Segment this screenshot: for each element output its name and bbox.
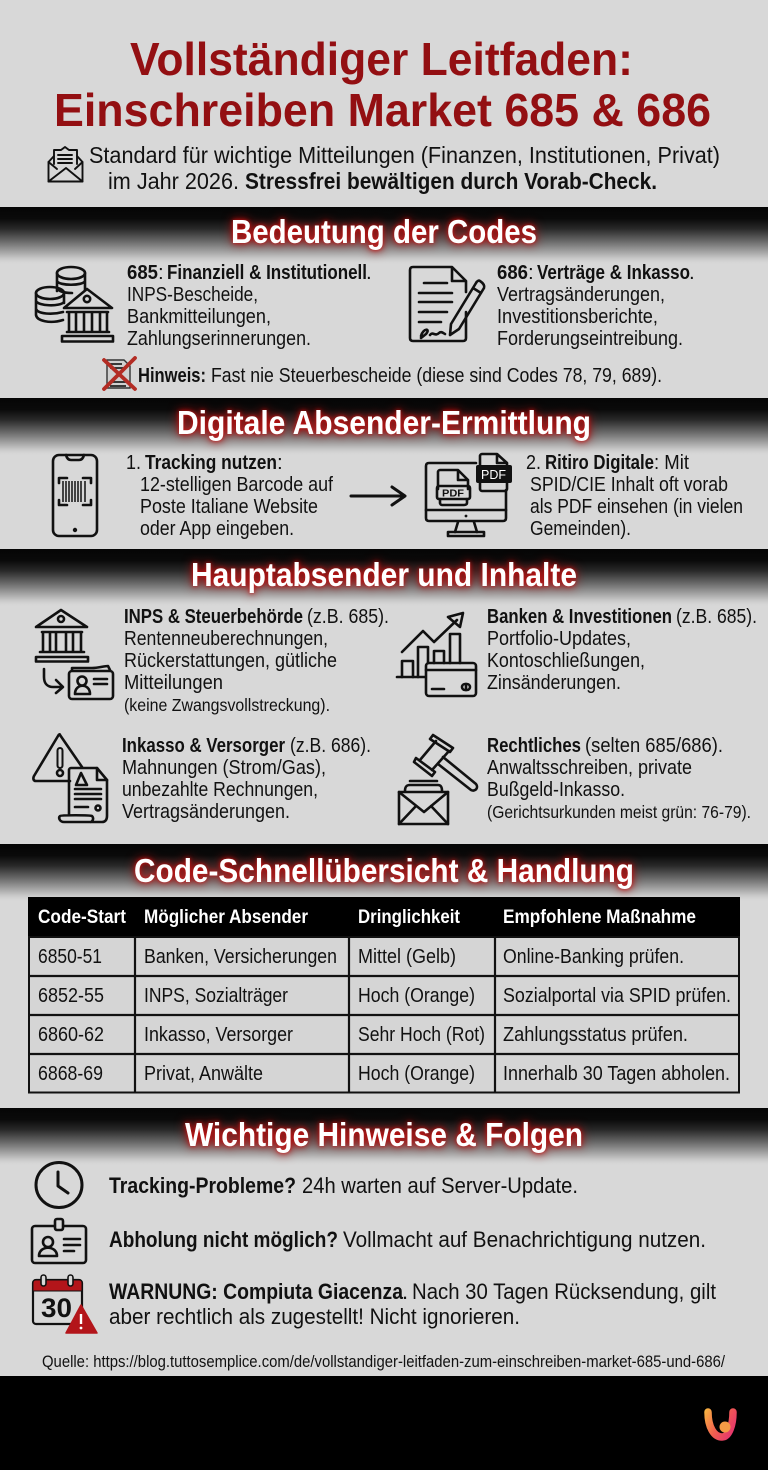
text block: legal xyxy=(487,734,751,822)
text block: 685: 685 xyxy=(127,261,158,284)
text block: step 1 tracking: 12-stelligen Barcode auf xyxy=(140,473,333,496)
row: 6850-51: Online-Banking prüfen. xyxy=(503,946,684,968)
text block: 685: : xyxy=(158,261,164,284)
subtitle xyxy=(89,142,720,194)
text block: 686: Vertragsänderungen, xyxy=(497,283,665,306)
text block: INPS and tax authority xyxy=(124,605,389,715)
panel: Digitale Absender-Ermittlung xyxy=(0,398,768,540)
text block: 686: 686 xyxy=(497,261,528,284)
icon: computer with PDF: PDF xyxy=(481,467,506,482)
text block: banks and investments: Portfolio-Updates, xyxy=(487,627,631,650)
row: 6860-62: 6860-62 xyxy=(38,1024,104,1046)
heading: Hauptabsender und Inhalte xyxy=(191,556,577,593)
icon: warning and document xyxy=(33,734,107,822)
table xyxy=(28,897,740,1093)
row: 6860-62: Zahlungsstatus prüfen. xyxy=(503,1024,688,1046)
warning note: WARNUNG: Compiuta Giacenza xyxy=(109,1279,404,1304)
row: 6850-51: Mittel (Gelb) xyxy=(358,946,456,968)
text block: banks and investments: Kontoschließungen, xyxy=(487,649,645,672)
text block: step 2 ritiro digitale xyxy=(526,451,743,540)
warning note: aber rechtlich als zugestellt! Nicht ignorieren. xyxy=(109,1304,520,1329)
text block: step 2 ritiro digitale: 2. xyxy=(526,451,541,474)
row: 6852-55 xyxy=(38,985,731,1007)
panel: Wichtige Hinweise und Folgen xyxy=(0,1108,768,1333)
title: Vollständiger Leitfaden: xyxy=(130,33,633,85)
icon: calendar with warning xyxy=(33,1275,97,1333)
text block: legal: Rechtliches xyxy=(487,734,581,757)
table header xyxy=(28,897,740,937)
text block: 685: INPS-Bescheide, xyxy=(127,283,258,306)
text block: 685 xyxy=(127,261,372,350)
table header: Dringlichkeit xyxy=(358,907,461,928)
row: 6850-51 xyxy=(38,946,684,968)
row: 6860-62: Inkasso, Versorger xyxy=(144,1024,293,1046)
text block: banks and investments: (z.B. 685). xyxy=(676,605,757,628)
text block: 686: : xyxy=(528,261,534,284)
text block: step 1 tracking: Tracking nutzen xyxy=(145,451,277,474)
text block: collection and utilities: Inkasso & Versorger xyxy=(122,734,285,757)
icon: computer with PDF: PDF xyxy=(442,488,464,500)
icon: open envelope xyxy=(48,147,82,182)
subtitle: Stressfrei bewältigen durch Vorab-Check. xyxy=(245,168,657,194)
row: 6852-55: 6852-55 xyxy=(38,985,104,1007)
row: 6850-51: 6850-51 xyxy=(38,946,102,968)
text block: INPS and tax authority: Mitteilungen xyxy=(124,671,223,694)
icon: logo xyxy=(708,1412,733,1437)
text block: 685: Finanziell & Institutionell xyxy=(167,261,367,284)
warning note: Nach 30 Tagen Rücksendung, gilt xyxy=(412,1279,716,1304)
tracking note: 24h warten auf Server-Update. xyxy=(302,1173,578,1198)
subtitle: Standard für wichtige Mitteilungen (Finanzen, Institutionen, Privat) xyxy=(89,142,720,168)
note: Hinweis: xyxy=(138,364,206,387)
pickup note xyxy=(109,1227,706,1252)
row: 6852-55: Sozialportal via SPID prüfen. xyxy=(503,985,731,1007)
table header: Empfohlene Maßnahme xyxy=(503,907,696,928)
row: 6860-62 xyxy=(38,1024,688,1046)
panel: Hauptabsender und Inhalte xyxy=(0,549,768,824)
text block: collection and utilities xyxy=(122,734,371,823)
pickup note: Abholung nicht möglich? xyxy=(109,1227,338,1252)
text block: step 1 tracking: Poste Italiane Website xyxy=(140,495,318,518)
icon: phone with barcode xyxy=(53,455,97,536)
row: 6868-69: 6868-69 xyxy=(38,1063,103,1085)
panel: Bedeutung der Codes xyxy=(0,207,768,389)
text block: 685: Bankmitteilungen, xyxy=(127,305,271,328)
text block: banks and investments: Zinsänderungen. xyxy=(487,671,621,694)
table header: Möglicher Absender xyxy=(144,907,309,928)
text block: step 1 tracking xyxy=(126,451,333,540)
text block: 686 xyxy=(497,261,695,350)
text block: 686: Forderungseintreibung. xyxy=(497,327,683,350)
warning note xyxy=(109,1279,716,1329)
row: 6860-62: Sehr Hoch (Rot) xyxy=(358,1024,485,1046)
icon: clock xyxy=(36,1162,82,1208)
text block: banks and investments xyxy=(487,605,757,694)
text block: INPS and tax authority: (z.B. 685). xyxy=(307,605,389,628)
icon: bank and ID card xyxy=(36,610,113,699)
pickup note: Vollmacht auf Benachrichtigung nutzen. xyxy=(343,1227,706,1252)
tracking note xyxy=(109,1173,578,1198)
text block: 686: Investitionsberichte, xyxy=(497,305,658,328)
icon: coins and bank xyxy=(36,267,113,342)
text block: INPS and tax authority: (keine Zwangsvollstreckung). xyxy=(124,695,330,715)
icon: ID badge xyxy=(32,1219,86,1263)
row: 6868-69: Hoch (Orange) xyxy=(358,1063,475,1085)
icon: contract and pen xyxy=(410,267,484,341)
icon: computer with PDF xyxy=(426,454,512,536)
row: 6868-69: Privat, Anwälte xyxy=(144,1063,263,1085)
text block: step 2 ritiro digitale: SPID/CIE Inhalt oft vorab xyxy=(530,473,728,496)
title: Einschreiben Market 685 & 686 xyxy=(54,84,711,136)
text block: 686: . xyxy=(689,261,695,284)
subtitle: im Jahr 2026. xyxy=(108,168,239,194)
warning note: . xyxy=(402,1279,408,1304)
row: 6852-55: Hoch (Orange) xyxy=(358,985,475,1007)
arrow xyxy=(351,487,405,505)
text block: 685: . xyxy=(366,261,372,284)
heading: Bedeutung der Codes xyxy=(231,213,537,250)
text block: collection and utilities: Vertragsänderungen. xyxy=(122,800,290,823)
panel: Code-Schnellübersicht und Handlung xyxy=(0,844,768,1093)
tracking note: Tracking-Probleme? xyxy=(109,1173,296,1198)
note: Fast nie Steuerbescheide (diese sind Codes 78, 79, 689). xyxy=(211,364,662,387)
text block: step 1 tracking: oder App eingeben. xyxy=(140,517,294,540)
text block: 685: Zahlungserinnerungen. xyxy=(127,327,311,350)
icon: growth chart and card xyxy=(397,613,476,696)
row: 6868-69 xyxy=(38,1063,730,1085)
text block: step 1 tracking: : xyxy=(277,451,283,474)
text block: 686: Verträge & Inkasso xyxy=(537,261,690,284)
text block: legal: Bußgeld-Inkasso. xyxy=(487,778,625,801)
icon: calendar with warning: 30 xyxy=(41,1293,72,1323)
heading: Digitale Absender-Ermittlung xyxy=(177,404,591,441)
text block: step 2 ritiro digitale: Ritiro Digitale xyxy=(545,451,654,474)
text block: banks and investments: Banken & Investitionen xyxy=(487,605,672,628)
row: 6852-55: INPS, Sozialträger xyxy=(144,985,288,1007)
heading: Wichtige Hinweise & Folgen xyxy=(185,1116,583,1153)
text block: INPS and tax authority: INPS & Steuerbehörde xyxy=(124,605,303,628)
text block: step 2 ritiro digitale: : Mit xyxy=(654,451,689,474)
text block: collection and utilities: (z.B. 686). xyxy=(290,734,371,757)
icon: no tax notice xyxy=(104,358,135,389)
title xyxy=(54,33,711,136)
text block: INPS and tax authority: Rückerstattungen, gütliche xyxy=(124,649,337,672)
text block: legal: Anwaltsschreiben, private xyxy=(487,756,692,779)
text block: legal: (selten 685/686). xyxy=(585,734,723,757)
text block: step 1 tracking: 1. xyxy=(126,451,141,474)
header xyxy=(48,33,720,194)
text block: collection and utilities: Mahnungen (Strom/Gas), xyxy=(122,756,326,779)
footer bar xyxy=(0,1376,768,1470)
text block: INPS and tax authority: Rentenneuberechnungen, xyxy=(124,627,328,650)
heading: Code-Schnellübersicht & Handlung xyxy=(134,852,634,889)
icon: gavel and envelope xyxy=(399,735,477,824)
row: 6850-51: Banken, Versicherungen xyxy=(144,946,337,968)
row: 6868-69: Innerhalb 30 Tagen abholen. xyxy=(503,1063,730,1085)
text block: collection and utilities: unbezahlte Rechnungen, xyxy=(122,778,318,801)
table header: Code-Start xyxy=(38,907,127,928)
text block: step 2 ritiro digitale: Gemeinden). xyxy=(530,517,631,540)
